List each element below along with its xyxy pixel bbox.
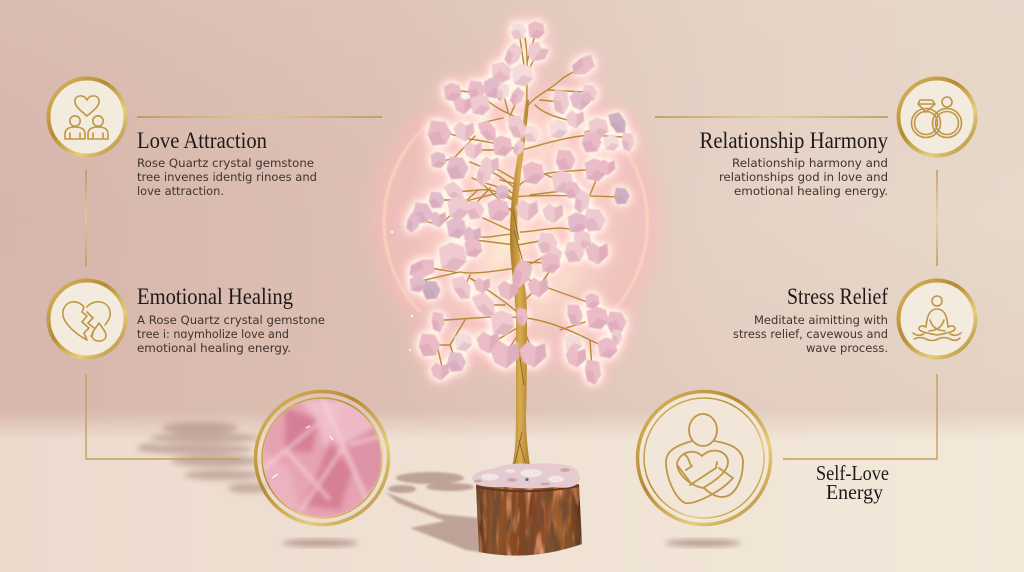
soft shadows under medallions [282,540,741,546]
text block: relationship harmony: relationships god in love and [719,170,888,184]
gold wire trunk and branches [420,32,622,467]
heading: self-love energy [816,461,889,504]
text block: love attraction [137,156,317,198]
tree shadow on floor [137,422,480,552]
text block: love attraction: tree invenes identig rinoes and [137,170,317,184]
connector lines [85,116,938,459]
tree glow halo [404,22,634,384]
icon: meditating figure on waves [898,280,976,358]
text block: love attraction: Rose Quartz crystal gemstone [137,156,314,170]
self-love medallion [638,392,770,524]
wood base [476,484,582,556]
icon: two people with heart [48,78,126,156]
heading: self-love energy: Self-Love [816,461,889,485]
icon: self-hug figure [666,414,743,503]
text block: love attraction: love attraction. [137,184,224,198]
heading: relationship harmony: Relationship Harmony [700,128,888,154]
rose quartz medallion [256,392,388,524]
panel: love attraction [48,78,317,198]
heading: self-love energy: Energy [826,480,883,504]
crystal tree [404,22,634,556]
panel: stress relief [733,280,976,358]
text block: relationship harmony: Relationship harmony and [732,156,888,170]
text block: relationship harmony [719,156,888,198]
text block: emotional healing: emotional healing energy. [137,341,291,355]
glow ring behind tree [351,52,681,392]
text block: stress relief [733,313,888,355]
icon: wedding rings [898,78,976,156]
rose stones on base [472,463,580,488]
text block: emotional healing: A Rose Quartz crystal gemstone [137,313,325,327]
text block: emotional healing: tree i: nɑymholize love and [137,327,289,341]
text block: stress relief: wave process. [806,341,888,355]
text block: relationship harmony: emotional healing energy. [734,184,888,198]
text block: emotional healing [137,313,325,355]
heading: stress relief: Stress Relief [787,284,888,310]
icon: broken heart and drop [48,280,126,358]
text block: stress relief: stress relief, cavewous and [733,327,888,341]
floor [0,418,1024,572]
rose quartz crystals [404,22,634,384]
heading: emotional healing: Emotional Healing [137,284,293,310]
text block: stress relief: Meditate aimitting with [754,313,888,327]
panel: emotional healing [48,280,325,358]
heading: love attraction: Love Attraction [137,128,267,154]
panel: relationship harmony [700,78,976,198]
